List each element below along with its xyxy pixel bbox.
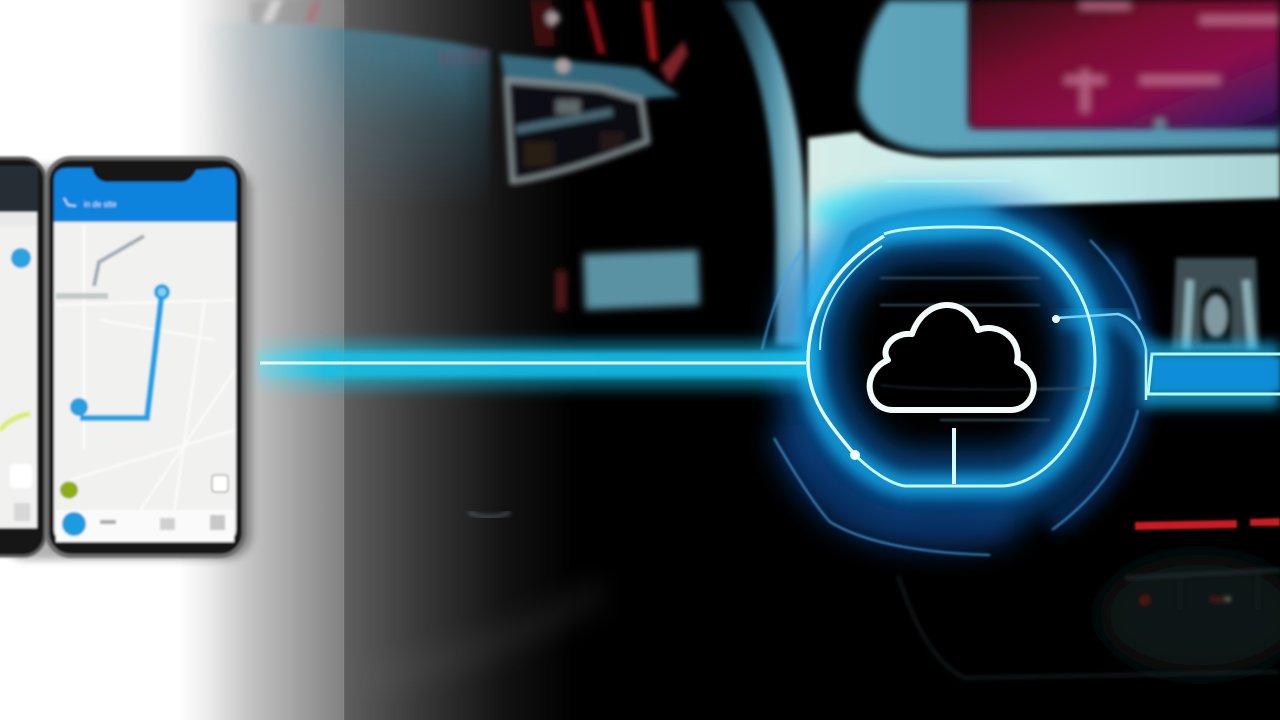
phone map screen xyxy=(54,200,236,542)
icon: cloud xyxy=(870,305,1034,410)
phone body xyxy=(47,158,244,556)
bottom bar items xyxy=(100,520,116,524)
green marker xyxy=(60,482,78,498)
white label in steering column xyxy=(556,250,700,310)
blue route xyxy=(80,292,162,418)
cyan wash on dashboard panel xyxy=(810,186,1000,238)
vent slats inside ring xyxy=(880,278,1100,420)
seam at image edge xyxy=(343,0,344,720)
neon ring around cloud xyxy=(808,227,1095,486)
faded items at top of fade panel xyxy=(250,0,344,24)
blue ring glow xyxy=(790,227,1140,532)
right beam to vent xyxy=(985,314,1280,408)
grey route xyxy=(94,236,144,286)
locate button xyxy=(62,512,86,536)
phone shadow xyxy=(0,166,252,560)
infotainment screen xyxy=(970,0,1280,128)
lower steering wheel rim xyxy=(345,590,600,680)
red stalk details xyxy=(436,0,688,84)
vent highlight bar xyxy=(866,270,870,350)
lower dashboard shapes xyxy=(898,570,1280,678)
bottom bar xyxy=(56,510,234,542)
light dashboard panel xyxy=(808,132,1280,320)
right phone xyxy=(47,158,244,556)
steering wheel control buttons xyxy=(500,54,680,182)
header text: in de stte xyxy=(84,200,117,209)
stem below cloud xyxy=(947,428,961,484)
light beam glow from phone to ring xyxy=(258,340,818,390)
dashboard highlight line xyxy=(885,180,1012,182)
left white fade panel xyxy=(0,0,344,720)
steering wheel hub xyxy=(220,24,493,188)
steering wheel rim xyxy=(722,0,806,345)
red dash lights xyxy=(1135,518,1280,530)
infotainment surround xyxy=(858,0,1280,152)
left phone, cropped xyxy=(0,158,45,556)
blue app header xyxy=(54,168,236,222)
air vent control xyxy=(1172,258,1260,350)
small highlight on steering column xyxy=(468,512,510,517)
map streets xyxy=(56,225,235,540)
outer thin arcs xyxy=(762,240,1140,555)
